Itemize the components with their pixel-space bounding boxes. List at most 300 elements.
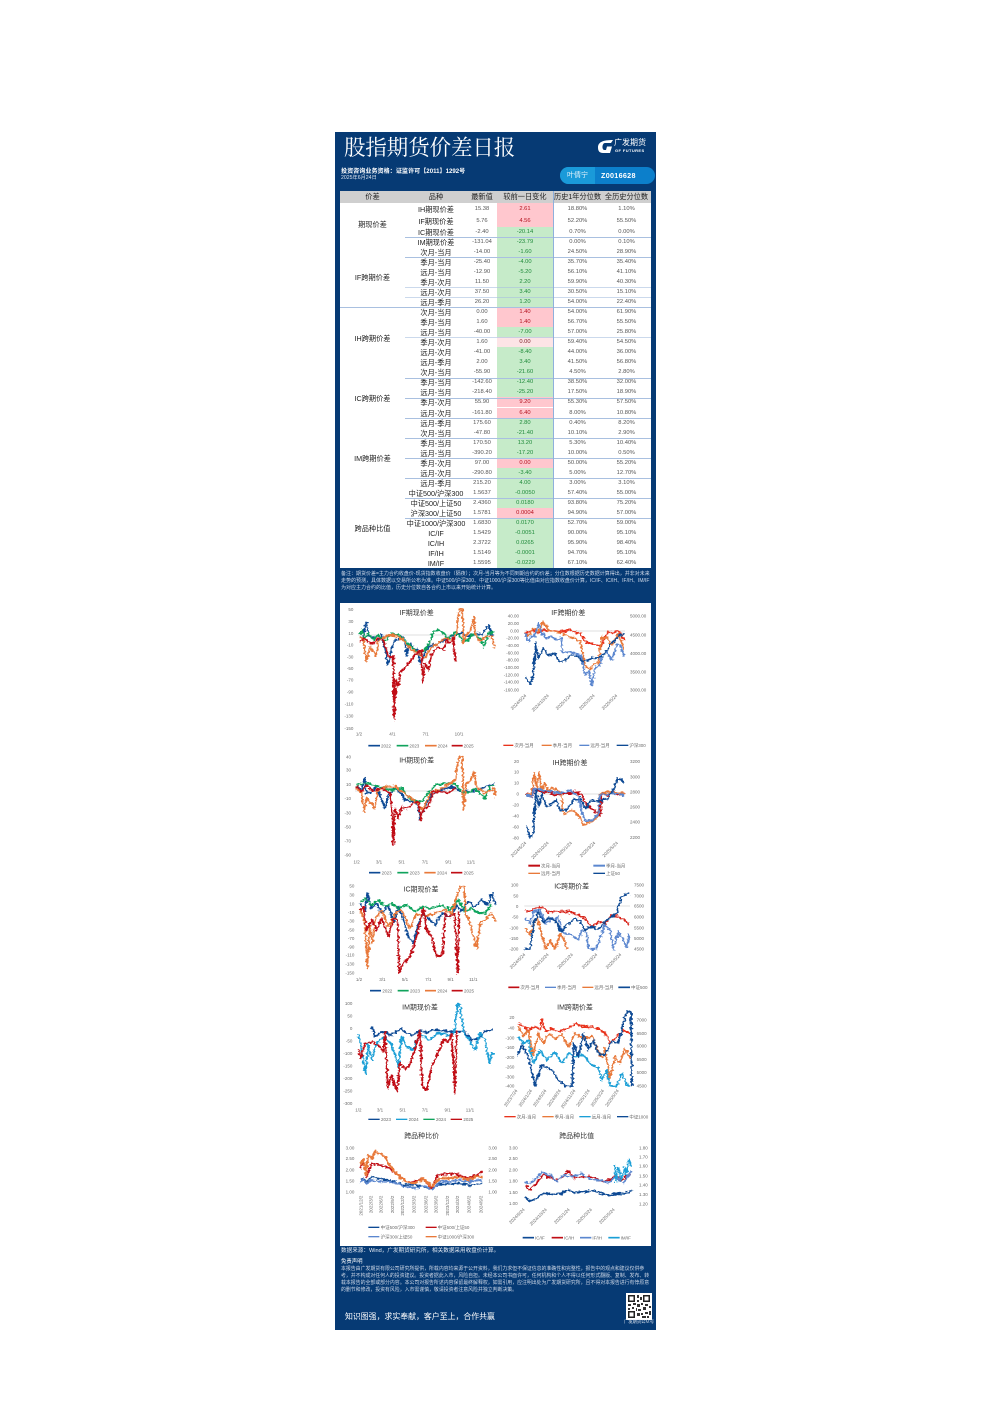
chart: IC跨期价差: 2025/1/24: [556, 952, 574, 970]
table rows: 56.80%: [617, 359, 636, 365]
chart: IH期现价差: -30: [345, 810, 352, 815]
table rows: 59.00%: [617, 520, 636, 526]
chart: IM跨期价差: -100: [505, 1035, 515, 1040]
table rows: 0.00: [519, 339, 531, 345]
chart: IH跨期价差: 季月-当月: [606, 862, 625, 869]
chart: 跨品种比价: [346, 1131, 498, 1240]
table rows: 1.60: [476, 339, 488, 345]
chart: IF跨期价差: 远月-当月: [590, 742, 610, 749]
table rows: 52.70%: [568, 520, 587, 526]
chart: IH期现价差: 40: [346, 754, 351, 759]
chart: 跨品种比价: 2024/3/2: [455, 1195, 460, 1213]
table rows: 15.38: [475, 206, 489, 212]
table rows: 95.90%: [568, 540, 587, 546]
chart: IF期现价差: 4/1: [389, 731, 396, 736]
table rows: 1.40: [519, 309, 531, 315]
table rows: -0.0001: [515, 550, 535, 556]
table rows: 62.40%: [617, 560, 636, 566]
chart: 跨品种比值: [508, 1131, 648, 1240]
table rows: -0.0050: [515, 490, 535, 496]
report date: 2025年6月24日: [341, 175, 377, 181]
table rows: 远月-季月: [420, 298, 452, 307]
table rows: 次月-当月: [420, 428, 452, 438]
chart: 跨品种比值: 1.40: [639, 1183, 648, 1188]
chart: 跨品种比价: 2021/12/2: [358, 1195, 363, 1216]
chart: IH跨期价差: 2024/6/24: [510, 840, 528, 858]
table rows: 0.00: [519, 460, 531, 466]
table rows: 2.00: [476, 359, 488, 365]
chart: IM跨期价差: 7000: [637, 1018, 647, 1023]
chart: IH期现价差: -50: [345, 824, 352, 829]
table rows: -20.14: [517, 229, 533, 235]
table rows: 22.40%: [617, 299, 636, 305]
chart: IC跨期价差: 次月-当月: [520, 984, 540, 991]
chart: IH跨期价差: 3200: [630, 759, 640, 764]
chart: IH跨期价差: 0: [516, 792, 519, 797]
table rows: 中证1000/沪深300: [407, 519, 465, 528]
chart: IF跨期价差: 2025/5/24: [601, 693, 619, 711]
table rows: 98.40%: [617, 540, 636, 546]
table rows: 54.00%: [568, 299, 587, 305]
chart: IC期现价差: -150: [345, 970, 355, 975]
table header: [340, 191, 651, 203]
table rows: 94.90%: [568, 510, 587, 516]
table rows: 0.40%: [569, 420, 586, 426]
table rows: 41.10%: [617, 269, 636, 275]
table rows: 170.50: [473, 440, 491, 446]
chart: 跨品种比值: 3.00: [509, 1145, 518, 1150]
table rows: 0.10%: [618, 239, 635, 245]
chart: IM跨期价差: 2023/7/24: [503, 1088, 519, 1108]
table rows: 5.76: [476, 218, 488, 224]
chart: IM期现价差: 9/1: [445, 1108, 451, 1113]
chart: IM期现价差: 50: [347, 1014, 353, 1019]
chart: IM跨期价差: 20: [509, 1015, 515, 1020]
chart: IH期现价差: 3/1: [376, 859, 383, 864]
chart: IC跨期价差: -100: [509, 925, 519, 930]
chart: IM期现价差: 2023: [381, 1117, 391, 1122]
chart: 跨品种比价: 2024/9/2: [478, 1195, 483, 1213]
table rows: 1.5429: [473, 530, 491, 536]
chart: IH跨期价差: 上证50: [606, 870, 620, 877]
chart: 跨品种比值: 1.30: [639, 1192, 648, 1197]
chart: 跨品种比价: 沪深300/上证50: [381, 1233, 413, 1240]
table rows: -161.80: [472, 410, 492, 416]
table rows: IF期现价差: [418, 217, 454, 226]
chart: IC跨期价差: 50: [513, 893, 519, 898]
table rows: 季月-当月: [420, 318, 452, 327]
chart: IM跨期价差: 2024/11/24: [560, 1088, 577, 1109]
table rows: -47.80: [474, 430, 490, 436]
chart: IF期现价差: 2025: [464, 743, 474, 748]
chart: IH期现价差: 2025: [464, 870, 474, 875]
logo: GF Futures: GF FUTURES: [615, 148, 645, 153]
chart: IH期现价差: IH期现价差: [399, 756, 434, 765]
chart: IH跨期价差: 20: [514, 759, 519, 764]
table rows: 25.80%: [617, 329, 636, 335]
chart: IC期现价差: 3/1: [379, 977, 386, 982]
table rows: 18.90%: [617, 389, 636, 395]
chart: IM跨期价差: 2025/3/24: [590, 1088, 605, 1108]
chart: IC期现价差: 2024: [437, 988, 448, 993]
table rows: 远月-当月: [420, 328, 452, 337]
group label: 期现价差: 期现价差: [358, 220, 387, 229]
chart: IF跨期价差: 5000.00: [630, 614, 647, 619]
chart: IH跨期价差: -40: [513, 814, 520, 819]
title: 股指期货价差日报: [344, 136, 515, 160]
table rows: 57.00%: [617, 510, 636, 516]
chart: IH期现价差: -70: [345, 838, 352, 843]
table rows: -218.40: [472, 389, 492, 395]
table rows: IC期现价差: [418, 228, 454, 237]
chart: 跨品种比价: 2.50: [488, 1156, 498, 1161]
chart: IF跨期价差: 2024/6/24: [510, 693, 528, 711]
chart: IM跨期价差: 5500: [637, 1057, 647, 1062]
table rows: 11.50: [475, 279, 489, 285]
chart: IF期现价差: -110: [345, 702, 354, 707]
table rows: 1.5637: [473, 490, 491, 496]
chart: 跨品种比值: 2024/10/24: [529, 1207, 548, 1227]
chart: 跨品种比价: 1.00: [346, 1189, 355, 1194]
chart: 跨品种比值: 1.20: [639, 1202, 648, 1207]
chart: IF跨期价差: -120.00: [504, 672, 519, 677]
table rows: 5.00%: [569, 470, 586, 476]
chart: IC期现价差: -130: [345, 962, 355, 967]
table rows: IF/IH: [428, 549, 444, 558]
table rows: -21.60: [517, 369, 533, 375]
table rows: 远月-次月: [420, 348, 452, 357]
chart: 跨品种比价: 1.00: [488, 1189, 498, 1194]
table rows: -12.40: [517, 379, 533, 385]
chart: IF跨期价差: 4500.00: [630, 632, 647, 637]
table rows: 2.80%: [618, 369, 635, 375]
table rows: -14.00: [474, 249, 490, 255]
chart: IF跨期价差: 3000.00: [630, 688, 647, 693]
chart: IC跨期价差: 2025/3/24: [581, 952, 599, 970]
chart: IC跨期价差: -200: [509, 947, 519, 952]
table rows: 远月-次月: [420, 469, 452, 478]
table rows: 1.5781: [473, 510, 491, 516]
table rows: 57.40%: [568, 490, 587, 496]
chart: IH期现价差: [345, 754, 495, 875]
chart: IM期现价差: -50: [346, 1038, 353, 1043]
chart: IF跨期价差: -80.00: [506, 658, 520, 663]
chart: 跨品种比价: 中证500/沪深300: [381, 1224, 415, 1231]
chart: IF期现价差: -130: [344, 713, 354, 718]
table rows: 32.00%: [617, 379, 636, 385]
table rows: 0.00%: [618, 229, 635, 235]
chart: IH跨期价差: 2025/5/24: [601, 840, 619, 858]
table rows: 13.20: [518, 440, 532, 446]
chart: IH跨期价差: 3000: [630, 774, 640, 779]
chart: IH跨期价差: 次月-当月: [541, 862, 560, 869]
chart: IM期现价差: 7/1: [422, 1108, 429, 1113]
chart: IM跨期价差: 2024/8/24: [546, 1088, 562, 1108]
logo: GF Futures: 广发期货: [614, 138, 646, 147]
chart: 跨品种比值: IC/IF: [535, 1235, 545, 1240]
chart: IM跨期价差: IM跨期价差: [557, 1003, 593, 1012]
chart: IH期现价差: -90: [345, 852, 352, 857]
chart: 跨品种比值: 2.00: [509, 1168, 518, 1173]
table rows: -2.40: [475, 229, 489, 235]
table rows: 9.20: [519, 399, 531, 405]
table rows: 67.10%: [568, 560, 587, 566]
table rows: 10.80%: [617, 410, 636, 416]
table rows: 55.50%: [617, 218, 636, 224]
chart: 跨品种比价: 2022/9/2: [390, 1195, 395, 1213]
chart: 跨品种比价: 2023/6/2: [423, 1195, 428, 1213]
chart: IF期现价差: 1/2: [356, 731, 363, 736]
chart: IF期现价差: 2023: [409, 743, 420, 748]
table rows: 94.70%: [568, 550, 587, 556]
chart: IM期现价差: [343, 1001, 494, 1122]
analyst badge: [560, 167, 655, 184]
chart: 跨品种比值: 1.80: [509, 1179, 518, 1184]
chart: IM期现价差: -300: [343, 1101, 353, 1106]
group label: IF跨期价差: IF跨期价差: [355, 273, 390, 282]
chart: IC跨期价差: 6000: [634, 914, 644, 919]
chart: IM期现价差: 0: [350, 1026, 353, 1031]
chart: IH跨期价差: 2800: [630, 789, 640, 794]
data source: 数据来源：Wind，广发期货研究所，相关数据采用收盘价计算。: [341, 1248, 499, 1254]
chart: IF期现价差: -50: [347, 666, 354, 671]
table rows: 10.10%: [568, 430, 587, 436]
chart: 跨品种比价: 2024/6/2: [467, 1195, 472, 1213]
chart: IC期现价差: [345, 884, 496, 993]
table rows: 季月-当月: [420, 258, 452, 267]
table rows: 24.50%: [568, 249, 587, 255]
chart: IF跨期价差: 0.00: [510, 628, 519, 633]
chart: 跨品种比值: IC/IH: [564, 1235, 574, 1240]
chart: 跨品种比值: 2025/5/24: [598, 1207, 616, 1225]
chart: IM期现价差: IM期现价差: [402, 1003, 438, 1012]
chart: 跨品种比价: 中证500/上证50: [438, 1224, 470, 1231]
chart: 跨品种比值: 1.80: [639, 1145, 648, 1150]
chart: 跨品种比值: IM/IF: [621, 1235, 631, 1240]
chart: IH跨期价差: 2024/10/24: [530, 840, 550, 860]
chart: IM期现价差: 11/1: [466, 1108, 475, 1113]
table rows: 季月-当月: [420, 378, 452, 387]
table rows: 0.0265: [516, 540, 534, 546]
table rows: 季月-次月: [420, 278, 452, 287]
table rows: -0.0051: [515, 530, 535, 536]
chart: IH跨期价差: -60: [513, 824, 520, 829]
table rows: 1.5595: [473, 560, 491, 566]
chart: IM跨期价差: 2025/1/24: [575, 1088, 591, 1108]
chart: 跨品种比价: 1.50: [346, 1179, 355, 1184]
chart: IM跨期价差: [503, 1003, 649, 1120]
table rows: 0.0004: [516, 510, 534, 516]
table rows: -17.20: [517, 450, 533, 456]
table rows: 远月-当月: [420, 268, 452, 277]
qualification line: 投资咨询业务资格：证监许可【2011】1292号: [341, 168, 465, 175]
table rows: -7.00: [518, 329, 532, 335]
group label: 跨品种比值: 跨品种比值: [355, 524, 390, 533]
chart: 跨品种比价: 2022/6/2: [378, 1195, 383, 1213]
table rows: 8.00%: [569, 410, 586, 416]
chart: IC跨期价差: 2024/6/24: [509, 952, 527, 970]
chart: IM跨期价差: -200: [505, 1055, 515, 1060]
chart: IM跨期价差: 2025/5/24: [604, 1088, 620, 1108]
chart: IC期现价差: 2022: [382, 988, 393, 993]
table footnote: 备注：期货价差=主力合约收盘价-现货指数收盘价（隔夜）；次月-当月等为不同到期合约的价差；分位数根据历史数据计算得出，并非对未来走势的预测，具体数据以交易所公布为准。中证500/沪深300、中证1000/沪深300等比值由对应指数收盘价计算，IC/IF、IC/IH、IF/IH、IM/IF为对应主力合约的比值，历史分位数自各合约上市以来开始统计计算。: [341, 570, 650, 590]
table rows: 54.00%: [568, 309, 587, 315]
chart: 跨品种比值: 1.00: [509, 1201, 518, 1206]
chart: IF期现价差: IF期现价差: [400, 608, 434, 617]
table rows: -1.60: [518, 249, 532, 255]
chart: IC期现价差: 30: [349, 893, 355, 898]
chart: IF期现价差: 2024: [438, 743, 448, 748]
table rows: -5.20: [518, 269, 532, 275]
chart: IM期现价差: 2024: [409, 1117, 419, 1122]
table rows: 4.50%: [569, 369, 586, 375]
chart: IM跨期价差: -260: [505, 1064, 515, 1069]
chart: IF跨期价差: 4000.00: [630, 651, 647, 656]
table rows: 3.40: [519, 289, 531, 295]
chart: IF跨期价差: 2025/1/24: [555, 693, 573, 711]
chart: IF跨期价差: -60.00: [506, 650, 520, 655]
chart: IF跨期价差: 3500.00: [630, 669, 647, 674]
table rows: 10.00%: [568, 450, 587, 456]
chart: IC跨期价差: [508, 882, 648, 991]
chart: 跨品种比价: 跨品种比价: [404, 1131, 439, 1140]
chart: IC跨期价差: 7500: [634, 883, 644, 888]
chart: IH跨期价差: 10: [514, 781, 519, 786]
logo: GF Futures: [598, 138, 646, 153]
chart: IF跨期价差: -140.00: [504, 680, 519, 685]
chart: IH跨期价差: 2025/3/24: [579, 840, 597, 858]
table rows: 61.90%: [617, 309, 636, 315]
table header: 最新值: [471, 192, 493, 201]
chart: IH期现价差: 1/2: [354, 859, 360, 864]
table rows: IC/IH: [428, 539, 444, 548]
chart: IM跨期价差: 5000: [637, 1070, 647, 1075]
table rows: -3.40: [518, 470, 532, 476]
chart: 跨品种比值: IF/IH: [592, 1235, 602, 1240]
chart: IF跨期价差: 次月-当月: [514, 742, 534, 749]
table rows: -23.79: [517, 239, 533, 245]
chart: 跨品种比价: 2.00: [488, 1168, 498, 1173]
chart: IM期现价差: -150: [343, 1063, 353, 1068]
chart: IC跨期价差: 0: [516, 904, 519, 909]
table rows: 1.5149: [473, 550, 491, 556]
table rows: 1.10%: [618, 206, 635, 212]
table rows: 35.40%: [617, 259, 636, 265]
chart: IC期现价差: -70: [348, 936, 355, 941]
chart: 跨品种比价: 2.50: [346, 1156, 355, 1161]
table rows: IM期现价差: [418, 238, 454, 247]
chart: IC期现价差: -110: [346, 953, 355, 958]
chart: IC跨期价差: 5500: [634, 925, 644, 930]
chart: IC期现价差: 11/1: [469, 977, 478, 982]
chart: IM跨期价差: 中证1000: [629, 1113, 649, 1120]
table rows: 30.50%: [568, 289, 587, 295]
table rows: -21.40: [517, 430, 533, 436]
chart: IM跨期价差: -160: [505, 1045, 515, 1050]
table rows: 季月-当月: [420, 438, 452, 448]
chart: IM跨期价差: -400: [505, 1084, 515, 1089]
chart: 跨品种比值: 2025/1/24: [553, 1207, 571, 1225]
chart: IM期现价差: 2025: [463, 1117, 474, 1122]
chart: 跨品种比价: 2022/3/2: [368, 1195, 373, 1213]
chart: IH期现价差: 10: [346, 782, 351, 787]
table rows: -131.04: [472, 239, 492, 245]
chart: IM跨期价差: 6500: [637, 1031, 647, 1036]
chart: IF跨期价差: 2025/3/24: [578, 693, 596, 711]
chart: IF跨期价差: -100.00: [504, 665, 519, 670]
table rows: 远月-次月: [420, 288, 452, 297]
chart: IH跨期价差: 2600: [630, 804, 640, 809]
table rows: 0.0170: [516, 520, 534, 526]
table rows: 3.40: [519, 359, 531, 365]
table rows: 次月-当月: [420, 308, 452, 317]
chart: IF跨期价差: 沪深300: [629, 742, 646, 749]
data table panel: [340, 191, 651, 568]
chart: 跨品种比价: 2.00: [346, 1168, 355, 1173]
table rows: 41.50%: [568, 359, 587, 365]
chart: 跨品种比价: 2023/3/2: [412, 1195, 417, 1213]
chart: IC跨期价差: 2024/10/24: [530, 952, 550, 972]
chart: IF期现价差: 2022: [381, 743, 391, 748]
chart: 跨品种比值: 1.50: [509, 1190, 518, 1195]
table rows: 50.00%: [568, 460, 587, 466]
table rows: 2.80: [519, 420, 531, 426]
chart: IH期现价差: 5/1: [399, 859, 405, 864]
chart: 跨品种比值: 1.70: [639, 1154, 648, 1159]
chart: IC期现价差: 7/1: [425, 977, 432, 982]
chart: IC跨期价差: 5000: [634, 936, 644, 941]
table rows: 中证500/沪深300: [409, 489, 463, 498]
chart: 跨品种比价: 3.00: [488, 1145, 498, 1150]
chart: IF跨期价差: -160.00: [504, 688, 519, 693]
disclaimer: 免责声明: [341, 1259, 363, 1265]
table rows: 2.20: [519, 279, 531, 285]
chart: 跨品种比价: 1.50: [488, 1179, 498, 1184]
table rows: -40.00: [474, 329, 490, 335]
chart: IH跨期价差: 2200: [630, 835, 640, 840]
table rows: 1.40: [519, 319, 531, 325]
table rows: 次月-当月: [420, 248, 452, 257]
chart: IC跨期价差: 6500: [634, 904, 644, 909]
table rules: [340, 191, 651, 568]
chart: IH期现价差: 30: [346, 768, 351, 773]
table rows: 远月-当月: [420, 449, 452, 458]
chart: IF跨期价差: 20.00: [508, 621, 519, 626]
table rows: -0.0229: [515, 560, 535, 566]
table rows: 10.40%: [617, 440, 636, 446]
chart: IH跨期价差: 2025/1/24: [555, 840, 573, 858]
chart: IH跨期价差: [510, 758, 640, 877]
table rows: -142.60: [472, 379, 492, 385]
table rows: 57.00%: [568, 329, 587, 335]
QR code: [626, 1293, 652, 1320]
chart: 跨品种比价: 2022/12/2: [400, 1195, 405, 1216]
table rows: -25.20: [517, 389, 533, 395]
table rows: 0.0180: [516, 500, 534, 506]
table rows: 56.10%: [568, 269, 587, 275]
table header: 历史1年分位数: [554, 192, 601, 201]
table rows: 59.90%: [568, 279, 587, 285]
chart: IF跨期价差: [503, 608, 647, 749]
table rows: -41.00: [474, 349, 490, 355]
chart: IF期现价差: -150: [344, 726, 354, 731]
table header: 品种: [429, 192, 443, 201]
table rows: 93.80%: [568, 500, 587, 506]
table rows: 中证500/上证50: [411, 499, 461, 508]
chart: IM期现价差: -200: [343, 1076, 353, 1081]
chart: IM跨期价差: 6000: [637, 1044, 647, 1049]
table rows: 54.50%: [617, 339, 636, 345]
